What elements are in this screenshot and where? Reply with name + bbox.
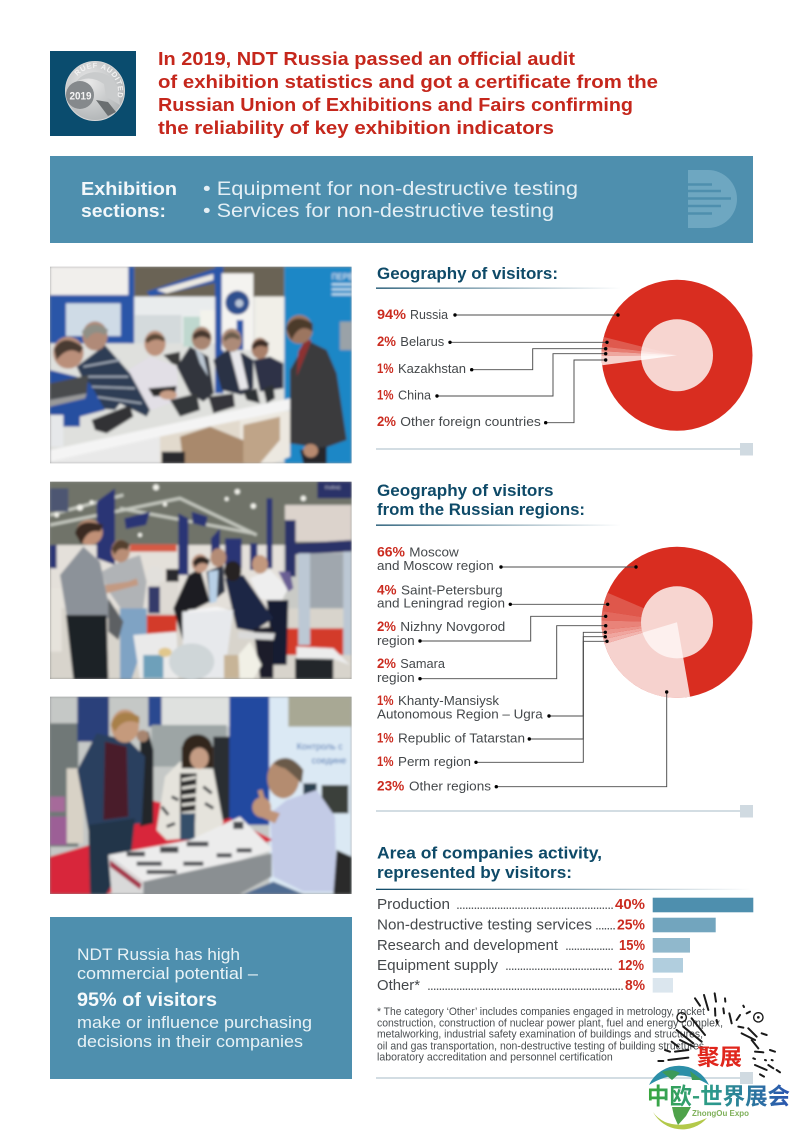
audit medal badge: RUEF AUDITED [74, 62, 124, 98]
photo: visitors at a stand with devices [50, 267, 353, 463]
footnote [377, 1006, 723, 1063]
headline: Russian Union of Exhibitions and Fairs confirming [158, 94, 633, 115]
row: non-destructive testing services 25% [377, 916, 716, 933]
label: other regions: Other regions [409, 779, 492, 794]
label: Saint-Petersburg: 4% [377, 582, 396, 597]
headline: of exhibition statistics and got a certificate from the [158, 71, 658, 92]
label: Kazakhstan: 1% [377, 361, 394, 376]
label: Samara: region [377, 670, 415, 685]
heading: Russian regions [377, 482, 585, 519]
label: other foreign countries [377, 358, 607, 429]
audit medal badge [50, 51, 136, 136]
row: other 8%: 8% [625, 978, 645, 994]
label: Nizhny Novgorod: region [377, 633, 415, 648]
row: other 8%: Other* [377, 978, 420, 994]
label: other foreign countries: 2% [377, 414, 396, 429]
label: Perm region: Perm region [398, 754, 471, 769]
label: Russia: Russia [410, 307, 449, 322]
photo: visitors talking in the exhibition hall: ГАЛАС [325, 485, 341, 491]
label: Nizhny Novgorod: 2% [377, 619, 396, 634]
panel: area of companies activity [376, 845, 753, 1084]
row: research and development 15% [377, 937, 690, 954]
label: Belarus: Belarus [400, 334, 445, 349]
label: China: China [398, 388, 432, 402]
callout: commercial potential: NDT Russia has high [77, 945, 240, 964]
label: ZhongOu Expo name: ZhongOu Expo [692, 1108, 749, 1118]
row: equipment supply 12%: 12% [618, 958, 644, 974]
label: Khanty-Mansiysk: Khanty-Mansiysk [398, 693, 500, 708]
photo: discussion over printed materials: Контроль с [297, 741, 343, 751]
row: research and development 15%: Research and development [377, 938, 558, 954]
panel: exhibition sections [50, 156, 753, 243]
panel: exhibition sections: sections: [81, 200, 166, 221]
icon: radial code dashes [658, 993, 780, 1077]
watermark: expo QR badge [647, 993, 790, 1129]
callout: commercial potential [50, 917, 352, 1079]
callout: commercial potential: 95% of visitors [77, 990, 217, 1011]
heading: Russian regions: Geography of visitors [377, 482, 554, 500]
icon: D logo [688, 170, 737, 228]
row: production 40%: 40% [615, 897, 645, 913]
label: China: 1% [377, 388, 394, 402]
label: China [377, 352, 607, 402]
photo: visitors at a stand with devices: ПЕРВ [332, 272, 353, 281]
headline: In 2019, NDT Russia passed an official audit [158, 48, 575, 69]
heading: Russian regions: from the Russian regions: [377, 501, 585, 519]
label: Khanty-Mansiysk: Autonomous Region – Ugra [377, 707, 543, 722]
footnote: laboratory accreditation and personnel certification [377, 1051, 613, 1063]
panel: geography of visitors from Russian regions [376, 482, 753, 818]
label: Samara: Samara [400, 656, 446, 671]
row: research and development 15%: 15% [619, 938, 645, 954]
label: Belarus [377, 334, 609, 349]
headline: the reliability of key exhibition indicators [158, 117, 554, 138]
label: Nizhny Novgorod: Nizhny Novgorod [400, 619, 505, 634]
row: non-destructive testing services 25%: Non-destructive testing services [377, 917, 592, 933]
photo: visitors talking in the exhibition hall [50, 482, 352, 680]
donut chart: Russian regions [601, 547, 752, 698]
label: Khanty-Mansiysk: 1% [377, 693, 394, 708]
label: Moscow: 66% [377, 545, 405, 560]
label: Saint-Petersburg [377, 582, 609, 610]
label: Moscow [377, 545, 638, 573]
label: other regions: 23% [377, 779, 404, 794]
photo: discussion over printed materials [50, 697, 352, 894]
label: Saint-Petersburg: Saint-Petersburg [401, 582, 503, 597]
label: Tatarstan: Republic of Tatarstan [398, 731, 525, 746]
label: Perm region: 1% [377, 754, 394, 769]
callout: commercial potential: decisions in their companies [77, 1032, 303, 1051]
label: Moscow: Moscow [409, 545, 459, 560]
photo: discussion over printed materials: соедине [312, 755, 346, 765]
audit medal badge: 2019 [70, 90, 92, 102]
panel: geography of visitors [376, 265, 753, 456]
donut chart: visitor countries [601, 280, 752, 431]
panel: exhibition sections: • Equipment for non-destructive testing [203, 179, 578, 200]
label: Khanty-Mansiysk [377, 631, 607, 722]
row: research and development 15%: ................. [565, 937, 614, 953]
label: Belarus: 2% [377, 334, 396, 349]
label: Samara [377, 624, 607, 685]
label: Moscow: and Moscow region [377, 558, 494, 573]
row: equipment supply 12% [377, 957, 683, 974]
heading: geography of visitors: Geography of visitors: [377, 265, 558, 283]
label: Tatarstan [377, 635, 607, 746]
label: Russia [377, 307, 620, 322]
label: red brand name: 聚展 [697, 1040, 742, 1072]
panel: exhibition sections: Exhibition [81, 178, 177, 199]
label: Tatarstan: 1% [377, 731, 394, 746]
label: other regions [377, 690, 668, 794]
label: Nizhny Novgorod [377, 615, 607, 648]
heading: companies activity: Area of companies activity, [377, 845, 602, 863]
row: other 8% [377, 977, 673, 994]
label: ZhongOu Expo name: 中欧-世界展会 [647, 1077, 790, 1111]
label: Perm region [377, 640, 609, 769]
label: Samara: 2% [377, 656, 396, 671]
heading: companies activity [377, 845, 602, 882]
footnote: oil and gas transportation, non-destructive testing of building structures, [377, 1040, 707, 1052]
icon: globe [649, 1066, 709, 1129]
callout: commercial potential: commercial potential – [77, 964, 259, 983]
footnote: metalworking, industrial safety examination of buildings and structures, [377, 1029, 703, 1041]
row: non-destructive testing services 25%: ....... [595, 916, 616, 932]
row: production 40%: ...................................................... [456, 896, 614, 912]
label: other foreign countries: Other foreign countries [400, 414, 541, 429]
label: Kazakhstan: Kazakhstan [398, 361, 466, 376]
headline [158, 48, 658, 138]
callout: commercial potential: make or influence purchasing [77, 1013, 312, 1032]
row: production 40%: Production [377, 897, 450, 913]
footnote: construction, construction of nuclear power plant, fuel and energy complex, [377, 1018, 723, 1030]
label: Kazakhstan [377, 347, 607, 376]
heading: companies activity: represented by visitors: [377, 864, 572, 882]
row: production 40% [377, 896, 753, 913]
row: equipment supply 12%: ..................................... [505, 957, 613, 973]
row: non-destructive testing services 25%: 25% [617, 917, 645, 933]
label: Russia: 94% [377, 307, 406, 322]
panel: exhibition sections: • Services for non-destructive testing [203, 201, 554, 222]
row: other 8%: .................................................................... [427, 977, 624, 993]
footnote: * The category ‘Other’ includes companies engaged in metrology, rocket [377, 1006, 705, 1018]
label: Saint-Petersburg: and Leningrad region [377, 595, 505, 610]
row: equipment supply 12%: Equipment supply [377, 958, 499, 974]
